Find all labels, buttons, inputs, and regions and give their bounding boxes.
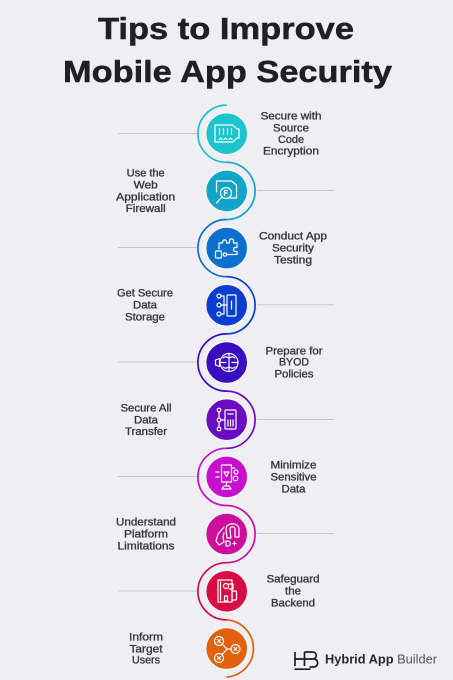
step 1: source code encryption: Source — [273, 123, 309, 135]
step 9: safeguard the backend: the — [285, 586, 301, 598]
step 10: inform target users — [129, 620, 253, 677]
step 5: BYOD policies: Policies — [274, 369, 314, 381]
step 2: web application firewall: Use the — [127, 168, 165, 180]
step 5: BYOD policies: BYOD — [279, 357, 309, 369]
step 6: secure data transfer: Data — [134, 415, 158, 427]
step 9: safeguard the backend — [118, 563, 320, 620]
step 6: secure data transfer — [120, 391, 334, 448]
step 3: app security testing — [118, 220, 327, 277]
step 1: source code encryption: Encryption — [263, 146, 319, 158]
step 8: platform limitations — [116, 506, 334, 563]
step 7: minimize sensitive data: Sensitive — [270, 472, 316, 484]
step 5: BYOD policies — [118, 334, 323, 391]
step 10: inform target users: Inform — [129, 632, 163, 644]
step 1: source code encryption: Secure with — [260, 111, 322, 123]
step 1: source code encryption — [118, 105, 322, 162]
title: Tips to Improve — [98, 11, 354, 46]
step 3: app security testing: Conduct App — [259, 231, 327, 243]
logo: Hybrid App Builder — [294, 652, 437, 669]
step 6: secure data transfer: Secure All — [120, 403, 172, 415]
step 2: web application firewall: Web — [134, 180, 158, 192]
step 8: platform limitations: Understand — [116, 517, 176, 529]
step 3: app security testing: Security — [272, 243, 315, 255]
step 7: minimize sensitive data: Data — [282, 484, 306, 496]
step 4: secure data storage: Get Secure — [117, 288, 173, 300]
step 8: platform limitations: Limitations — [118, 541, 175, 553]
step 1: source code encryption: Code — [278, 134, 304, 146]
step 7: minimize sensitive data: Minimize — [270, 460, 316, 472]
step 3: app security testing: Testing — [274, 255, 312, 267]
step 4: secure data storage: Data — [133, 300, 157, 312]
step 4: secure data storage: Storage — [125, 312, 165, 324]
step 10: inform target users: Users — [132, 655, 161, 667]
step 5: BYOD policies: Prepare for — [266, 346, 323, 358]
logo: Hybrid App Builder: Hybrid App Builder — [325, 652, 437, 666]
title: Mobile App Security — [63, 54, 393, 89]
step 10: inform target users: Target — [130, 644, 162, 656]
step 6: secure data transfer: Transfer — [125, 426, 167, 438]
step 4: secure data storage — [117, 277, 334, 334]
step 9: safeguard the backend: Safeguard — [266, 574, 320, 586]
step 9: safeguard the backend: Backend — [271, 598, 315, 610]
step 7: minimize sensitive data — [118, 448, 316, 506]
title — [63, 11, 393, 89]
step 2: web application firewall: Application — [116, 192, 175, 204]
step 8: platform limitations: Platform — [124, 529, 168, 541]
step 2: web application firewall: Firewall — [126, 203, 166, 215]
step 2: web application firewall — [116, 162, 334, 220]
